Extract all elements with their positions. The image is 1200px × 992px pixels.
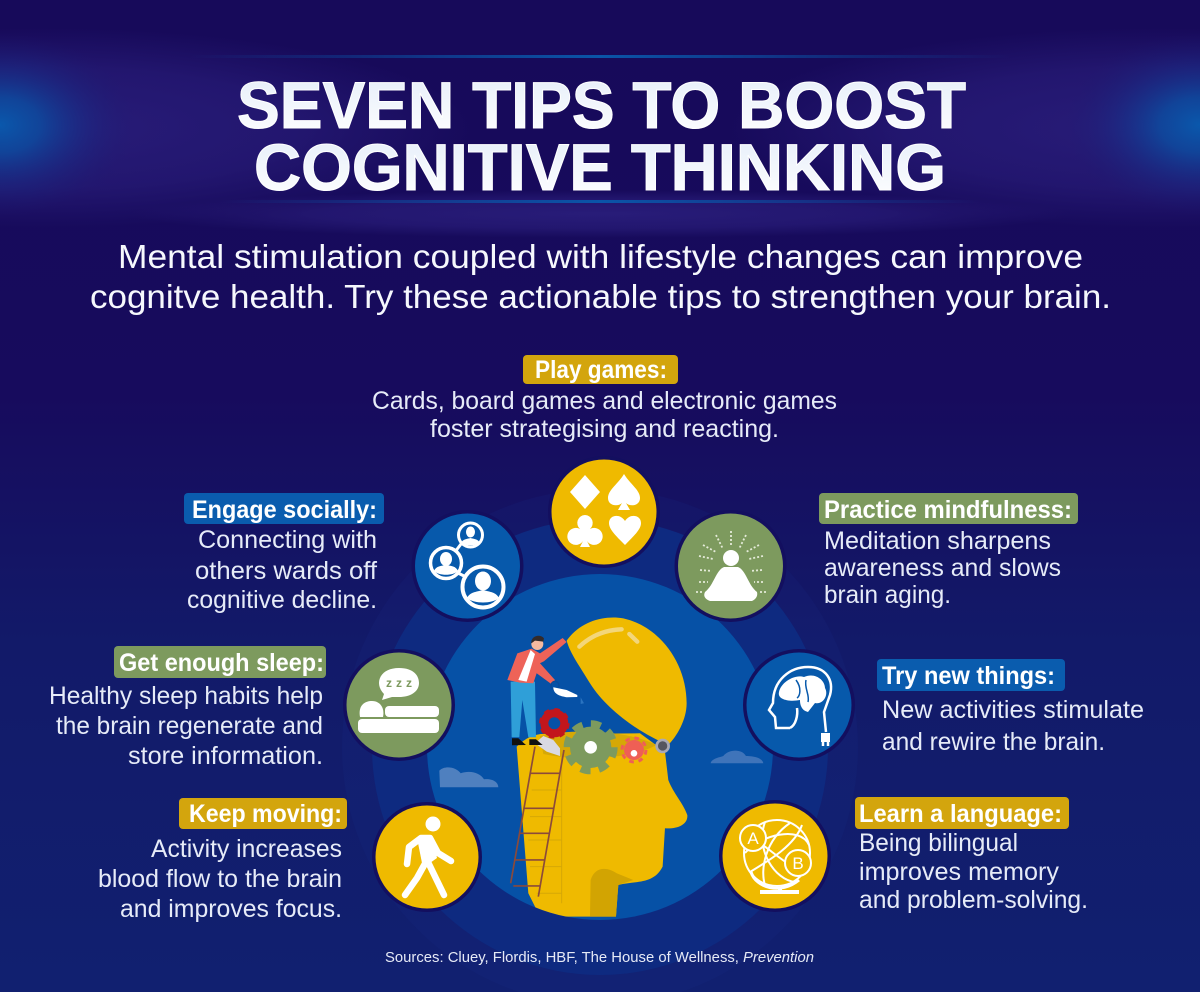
tip: get enough sleep: Healthy sleep habits help: [49, 682, 323, 710]
man: [507, 636, 584, 745]
tip: keep moving: and improves focus.: [120, 895, 342, 923]
head lower part: [517, 733, 687, 917]
tip: engage socially: cognitive decline.: [187, 586, 377, 614]
tip: try new things: [877, 659, 1144, 756]
icon: globe with letters: A: [747, 829, 759, 848]
icon: meditating figure: [674, 510, 786, 622]
tip: practice mindfulness: Practice mindfulness:: [824, 496, 1072, 524]
tip: practice mindfulness: [819, 493, 1078, 609]
tip: keep moving: Activity increases: [151, 835, 342, 863]
clouds: [439, 751, 763, 787]
title: SEVEN TIPS TO BOOST: [237, 68, 966, 142]
tip: play games: [372, 355, 837, 443]
tip: play games: Play games:: [535, 356, 667, 384]
icon: sleeping in bed: [343, 649, 455, 761]
icon: globe with letters: [719, 800, 831, 912]
central illustration: head, man and gears: [439, 617, 763, 917]
tip: engage socially: Connecting with: [198, 526, 377, 554]
tip: learn a language: and problem-solving.: [859, 886, 1088, 914]
tip: play games: Cards, board games and electronic games: [372, 387, 837, 415]
tip: learn a language: Learn a language:: [859, 800, 1062, 828]
tip: practice mindfulness: brain aging.: [824, 581, 951, 609]
tip: learn a language: improves memory: [859, 858, 1059, 886]
tip: play games: foster strategising and reacting.: [430, 415, 779, 443]
subtitle: Mental stimulation coupled with lifestyle changes can improve: [118, 238, 1083, 275]
subtitle: cognitve health. Try these actionable tips to strengthen your brain.: [90, 278, 1111, 315]
tip: get enough sleep: Get enough sleep:: [119, 649, 324, 677]
gears: [535, 710, 670, 771]
tip: practice mindfulness: Meditation sharpens: [824, 527, 1051, 555]
icon: playing card suits: [548, 456, 660, 568]
ladder shadow on head: [528, 757, 562, 903]
subtitle: [90, 238, 1111, 315]
tip: learn a language: [855, 797, 1088, 914]
tip: get enough sleep: [49, 646, 326, 770]
title: [237, 68, 966, 204]
icon: sleeping in bed: zzz: [386, 676, 412, 690]
head neck shadow: [590, 869, 633, 917]
opening band: [540, 731, 657, 758]
tip: try new things: and rewire the brain.: [882, 728, 1105, 756]
skull cap: [567, 617, 687, 745]
icon: connected people: [412, 510, 524, 622]
tip: get enough sleep: store information.: [128, 742, 323, 770]
central backdrop circles: [342, 489, 858, 992]
icon: walking person: [372, 802, 482, 912]
tip: engage socially: [184, 493, 384, 614]
tip: try new things: Try new things:: [882, 662, 1055, 690]
tip: keep moving: blood flow to the brain: [98, 865, 342, 893]
icon: globe with letters: B: [792, 854, 804, 873]
ladder: [511, 747, 564, 897]
tip: keep moving: [98, 798, 347, 923]
title: COGNITIVE THINKING: [254, 130, 946, 204]
tip: learn a language: Being bilingual: [859, 829, 1018, 857]
tip: get enough sleep: the brain regenerate and: [56, 712, 323, 740]
tip: engage socially: Engage socially:: [192, 496, 377, 524]
tip: try new things: New activities stimulate: [882, 696, 1144, 724]
sources: Sources: Cluey, Flordis, HBF, The House of Wellness, Prevention: [385, 950, 814, 966]
tip: keep moving: Keep moving:: [189, 800, 342, 828]
icon: brain and plug: [743, 649, 855, 761]
tip: engage socially: others wards off: [195, 557, 377, 585]
tip: practice mindfulness: awareness and slows: [824, 554, 1061, 582]
